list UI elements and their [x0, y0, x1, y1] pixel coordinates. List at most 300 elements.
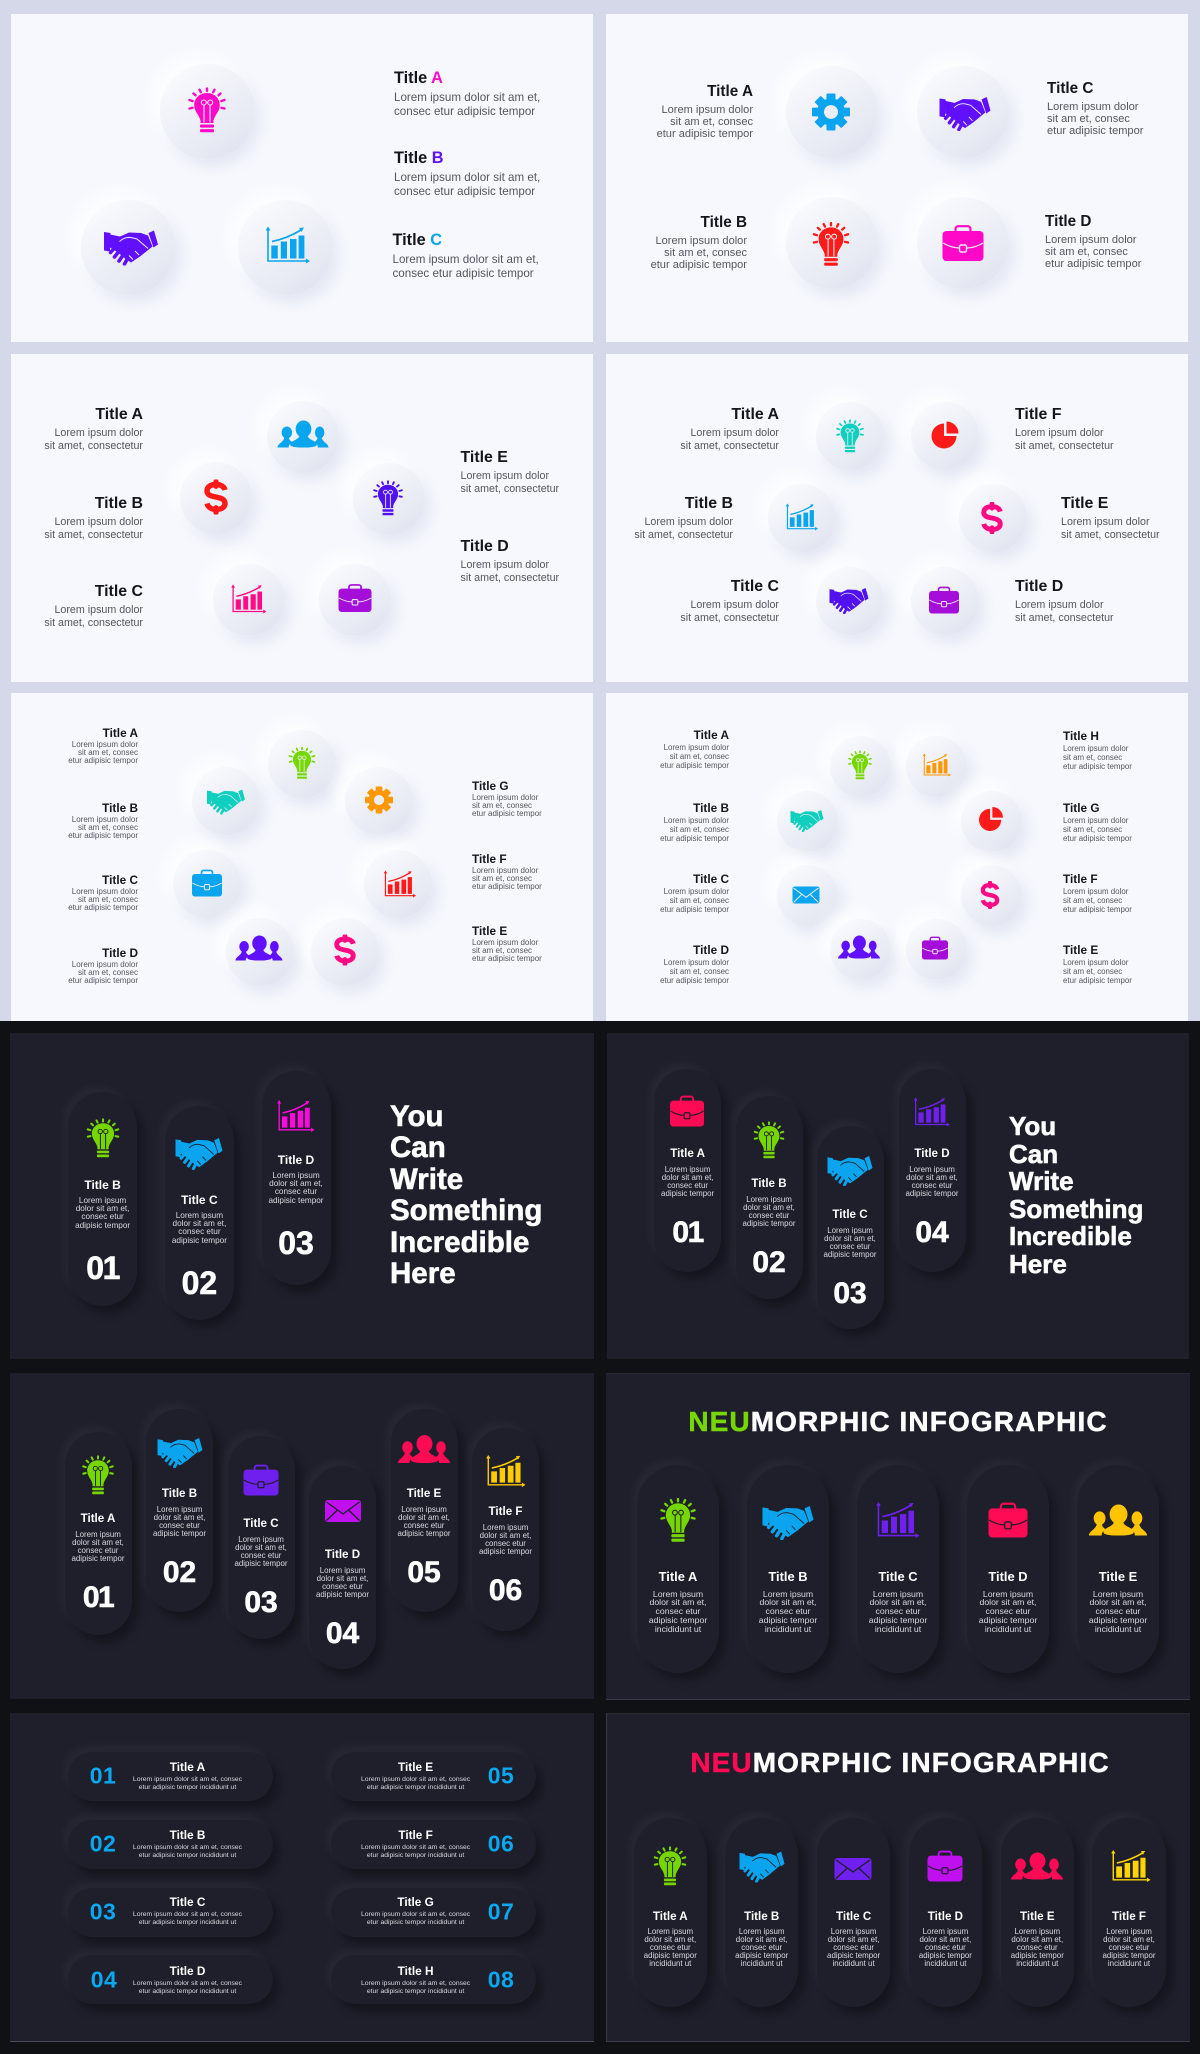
text: Title E: incididunt ut: [1095, 1624, 1141, 1634]
text: Title G: [1063, 801, 1132, 843]
text: Title C: Lorem ipsum dolor: [1047, 101, 1138, 113]
text: Title D: adipisic tempor: [979, 1615, 1037, 1625]
text: Title E: [361, 1759, 470, 1792]
circle: dollar: [961, 864, 1022, 926]
number 07: 07: [488, 1898, 514, 1924]
text: Title F: [1015, 406, 1114, 452]
text: Title B: Title B: [84, 1178, 121, 1192]
pill B: [725, 1818, 798, 2007]
text: Title B: Title B: [685, 495, 733, 512]
text: Title C: Lorem ipsum dolor: [664, 886, 729, 896]
text: Title C: [172, 1193, 227, 1245]
text: Title G: Lorem ipsum dolor: [472, 793, 538, 802]
circle: chart: [238, 200, 332, 294]
pill E: [1001, 1818, 1074, 2007]
text: Title D: adipisic tempor: [268, 1196, 324, 1205]
pill 05: [331, 1752, 536, 1801]
text: Title D: Lorem ipsum dolor: [664, 958, 729, 966]
text: Title B: Title B: [394, 149, 443, 167]
text: Title F: dolor sit am et,: [1103, 1935, 1155, 1944]
number 01: 01: [672, 1216, 703, 1249]
text: Title C: Lorem ipsum: [827, 1226, 873, 1235]
text: Title C: [234, 1516, 288, 1568]
text: Title D: sit amet, consectetur: [1015, 612, 1114, 624]
text: Title D: adipisic tempor: [905, 1189, 959, 1198]
text: Title C: consec etur adipisic tempor: [392, 267, 534, 280]
number 08: 08: [488, 1966, 514, 1992]
text: Title C: Lorem ipsum dolor sit am et,: [392, 253, 539, 266]
text: Title E: Lorem ipsum: [401, 1505, 447, 1514]
circle: gear: [345, 767, 413, 835]
text: Title H: Title H: [1063, 729, 1099, 743]
circle: handshake: [816, 567, 884, 635]
text: Title E: Lorem ipsum dolor sit am et, consec: [361, 1776, 470, 1783]
text: Title A: etur adipisic tempor incididunt ut: [139, 1784, 236, 1791]
circle: people: [267, 401, 339, 473]
text: Title C: [133, 1894, 242, 1927]
number 04: 04: [915, 1216, 949, 1249]
pill 07: [331, 1888, 536, 1937]
text: Title C: [68, 873, 138, 912]
text: Title E: Title E: [1061, 495, 1108, 512]
circle: people: [830, 918, 890, 980]
circle: briefcase: [319, 564, 391, 636]
pill 03: [262, 1071, 330, 1285]
text: Title E: Title E: [398, 1760, 433, 1774]
number 06: 06: [489, 1574, 522, 1607]
text: Title B: consec etur: [749, 1211, 789, 1220]
circle: chart: [213, 564, 285, 636]
text: Title D: Title D: [1045, 213, 1091, 230]
text: Title A: [680, 406, 779, 452]
text: Title B: dolor sit am et,: [743, 1203, 795, 1212]
number 01: 01: [90, 1762, 116, 1788]
text: Title D: consec etur: [322, 1582, 363, 1591]
text: Title D: consec etur: [275, 1187, 317, 1196]
text: Title A: Lorem ipsum dolor: [72, 740, 138, 749]
text: Title H: sit am et, consec: [1063, 753, 1122, 762]
text: Title A: adipisic tempor: [661, 1189, 714, 1198]
text: Title D: Lorem ipsum dolor sit am et, consec: [133, 1980, 242, 1987]
text: Title B: Title B: [701, 214, 747, 231]
pill A: [634, 1818, 707, 2007]
text: Title B: adipisic tempor: [742, 1219, 796, 1228]
text: Title D: [133, 1963, 242, 1996]
text: Title D: Title D: [914, 1147, 950, 1160]
text: Title B: dolor sit am et,: [76, 1204, 129, 1213]
text: Title D: consec etur: [925, 1943, 966, 1952]
pill A: [637, 1465, 719, 1673]
text: Title D: [1015, 578, 1114, 624]
icon: briefcase: [670, 1096, 704, 1126]
headline: Write: [1009, 1166, 1074, 1196]
text: Title D: [660, 943, 729, 985]
text: Title D: sit am et, consec: [1045, 246, 1128, 258]
number 02: 02: [163, 1556, 196, 1589]
icon: briefcase: [928, 1850, 963, 1882]
text: Title D: adipisic tempor: [919, 1951, 972, 1960]
icon: handshake: [739, 1852, 784, 1882]
text: Title D: Lorem ipsum: [983, 1589, 1033, 1599]
text: Title G: Title G: [397, 1895, 434, 1909]
text: Title D: Title D: [325, 1548, 360, 1561]
text: Title F: Title F: [472, 852, 507, 866]
pill 01: [64, 1432, 132, 1635]
icon: chart: [278, 1100, 314, 1132]
text: Title G: Lorem ipsum dolor sit am et, consec: [361, 1911, 470, 1918]
text: Title F: [472, 852, 542, 891]
text: Title D: [268, 1153, 324, 1205]
text: Title D: Lorem ipsum: [909, 1165, 955, 1174]
pill F: [1092, 1818, 1166, 2007]
pill 06: [331, 1820, 536, 1869]
text: Title B: dolor sit am et,: [736, 1935, 788, 1944]
text: Title C: dolor sit am et,: [870, 1597, 926, 1607]
text: Title C: Title C: [1047, 80, 1093, 97]
icon: bulb: [660, 1498, 696, 1542]
text: Title B: etur adipisic tempor incididunt ut: [139, 1852, 236, 1859]
text: Title C: Lorem ipsum: [238, 1535, 284, 1544]
text: Title A: Title A: [694, 728, 729, 742]
text: Title B: Title B: [95, 495, 143, 512]
text: Title B: [759, 1569, 817, 1633]
text: Title B: Title B: [162, 1487, 197, 1500]
text: Title B: adipisic tempor: [759, 1615, 817, 1625]
text: Title F: etur adipisic tempor: [472, 882, 542, 891]
text: Title C: sit amet, consectetur: [680, 612, 779, 624]
text: Title B: Lorem ipsum: [739, 1927, 784, 1936]
text: Title B: Lorem ipsum: [157, 1505, 202, 1514]
text: Title C: Title C: [102, 873, 138, 887]
text: Title D: incididunt ut: [924, 1959, 966, 1968]
icon: handshake: [176, 1138, 222, 1170]
text: Title C: [827, 1909, 880, 1968]
text: Title A: Lorem ipsum: [75, 1530, 121, 1539]
text: Title E: [1089, 1569, 1147, 1633]
text: Title C: [680, 578, 779, 624]
text: Title A: consec etur: [78, 1546, 118, 1555]
circle: dollar: [959, 484, 1027, 552]
circle: chart: [906, 736, 966, 796]
pill D: [909, 1818, 982, 2007]
icon: briefcase: [988, 1502, 1028, 1538]
text: Title C: Title C: [170, 1895, 205, 1909]
pill 04: [68, 1955, 273, 2004]
number 02: 02: [90, 1830, 116, 1856]
text: Title B: Lorem ipsum: [79, 1196, 126, 1205]
text: Title C: incididunt ut: [875, 1624, 921, 1634]
text: Title B: Lorem ipsum dolor: [54, 516, 143, 528]
text: Title A: incididunt ut: [649, 1959, 691, 1968]
text: Title D: incididunt ut: [985, 1624, 1031, 1634]
text: Title D: Title D: [460, 538, 509, 555]
panel: four pills with headline: [607, 1033, 1189, 1359]
text: Title A: Title A: [103, 726, 138, 740]
text: Title H: etur adipisic tempor incididunt ut: [367, 1988, 464, 1995]
text: Title E: incididunt ut: [1016, 1959, 1058, 1968]
text: Title B: Title B: [170, 1828, 205, 1842]
headline: You: [390, 1100, 444, 1133]
text: Title F: sit amet, consectetur: [1015, 440, 1114, 452]
text: Title B: Lorem ipsum dolor: [72, 815, 138, 824]
text: Title F: etur adipisic tempor incididunt ut: [367, 1852, 464, 1859]
text: Title C: Title C: [95, 583, 143, 600]
text: Title D: Lorem ipsum dolor: [1015, 599, 1104, 611]
text: Title G: Title G: [1063, 801, 1100, 815]
text: Title F: sit am et, consec: [472, 874, 532, 883]
text: Title D: Title D: [988, 1569, 1028, 1584]
text: Title C: dolor sit am et,: [828, 1935, 879, 1944]
text: Title A: [644, 1909, 697, 1968]
text: Title A: dolor sit am et,: [662, 1173, 713, 1182]
text: Title B: Lorem ipsum: [763, 1589, 813, 1599]
text: Title E: Lorem ipsum dolor: [460, 470, 549, 482]
text: Title A: Lorem ipsum: [653, 1589, 703, 1599]
icon: people: [1089, 1504, 1147, 1536]
panel: seven circles: [11, 693, 593, 1021]
pill 04: [898, 1069, 966, 1272]
text: Title F: [1102, 1909, 1156, 1968]
text: Title C: Title C: [693, 872, 729, 886]
circle: chart: [768, 484, 836, 552]
text: Title E: etur adipisic tempor: [472, 954, 542, 963]
text: Title A: adipisic tempor: [71, 1554, 125, 1563]
text: Title D: [979, 1569, 1037, 1633]
pill B: [747, 1465, 829, 1673]
text: Title C: etur adipisic tempor incididunt ut: [139, 1919, 236, 1926]
text: Title B: [742, 1176, 796, 1228]
text: Title D: dolor sit am et,: [317, 1574, 368, 1583]
text: Title G: sit am et, consec: [1063, 825, 1122, 834]
number 04: 04: [326, 1617, 359, 1650]
text: Title G: Title G: [472, 779, 508, 793]
icon: chart: [876, 1502, 920, 1538]
text: Title F: Lorem ipsum: [483, 1523, 528, 1532]
circle: handshake: [776, 790, 838, 852]
text: Title C: [869, 1569, 927, 1633]
text: Title B: consec etur: [159, 1521, 200, 1530]
text: Title B: Title B: [102, 801, 138, 815]
text: Title F: adipisic tempor: [479, 1547, 532, 1556]
text: Title F: adipisic tempor: [1102, 1951, 1156, 1960]
text: Title B: [68, 801, 138, 840]
text: Title D: Lorem ipsum: [923, 1927, 968, 1936]
text: Title G: [361, 1894, 470, 1927]
text: Title E: Title E: [407, 1487, 441, 1500]
text: Title B: consec etur: [766, 1606, 810, 1616]
text: Title C: Title C: [181, 1193, 218, 1207]
text: Title A: [657, 83, 753, 140]
text: Title F: consec etur: [1109, 1943, 1149, 1952]
text: Title A: sit amet, consectetur: [44, 440, 143, 452]
text: Title E: consec etur: [404, 1521, 444, 1530]
text: Title F: consec etur: [485, 1539, 526, 1548]
text: Title D: etur adipisic tempor: [68, 976, 138, 985]
text: Title E: dolor sit am et,: [1011, 1935, 1063, 1944]
text: Title A: etur adipisic tempor: [68, 756, 138, 765]
text: Title A: incididunt ut: [655, 1624, 701, 1634]
text: Title C: sit am et, consec: [78, 895, 138, 904]
text: Title C: adipisic tempor: [234, 1559, 288, 1568]
text: Title C: etur adipisic tempor: [660, 905, 729, 914]
text: Title G: [472, 779, 542, 818]
circle: pie: [911, 402, 979, 470]
circle: dollar: [311, 918, 379, 986]
text: Title D: etur adipisic tempor: [1045, 258, 1141, 270]
text: Title C: consec etur: [830, 1242, 870, 1251]
text: Title D: Title D: [928, 1910, 963, 1923]
text: Title E: Lorem ipsum dolor: [1063, 958, 1128, 966]
text: Title A: Title A: [81, 1512, 115, 1525]
text: Title C: Lorem ipsum dolor sit am et, consec: [133, 1911, 242, 1918]
panel: eight horizontal pills: [10, 1713, 594, 2042]
text: Title F: Title F: [1063, 872, 1098, 886]
pill 03: [816, 1126, 884, 1329]
text: Title E: adipisic tempor: [1089, 1615, 1147, 1625]
circle: bulb: [816, 402, 884, 470]
text: Title C: Title C: [392, 231, 442, 249]
text: Title D: [316, 1547, 369, 1599]
circle: briefcase: [906, 918, 966, 980]
headline: Can: [390, 1131, 446, 1164]
pill 02: [68, 1820, 273, 1869]
pill 04: [309, 1466, 376, 1669]
number 01: 01: [83, 1581, 113, 1614]
text: Title E: adipisic tempor: [397, 1529, 451, 1538]
pill 03: [68, 1888, 273, 1937]
number 02: 02: [182, 1265, 217, 1301]
text: Title B: Lorem ipsum: [746, 1195, 792, 1204]
text: Title A: sit am et, consec: [670, 752, 729, 761]
icon: chart: [1112, 1850, 1150, 1882]
text: Title B: Lorem ipsum dolor: [664, 816, 729, 824]
text: Title B: adipisic tempor: [153, 1529, 206, 1538]
text: Title D: Lorem ipsum: [320, 1566, 365, 1575]
text: Title E: sit am et, consec: [472, 946, 532, 955]
text: Title A: Title A: [670, 1147, 705, 1160]
text: Title A: sit amet, consectetur: [680, 440, 779, 452]
text: Title B: etur adipisic tempor: [660, 834, 729, 843]
text: Title E: [1063, 943, 1132, 985]
text: Title D: consec etur: [912, 1181, 952, 1190]
text: Title C: Lorem ipsum dolor: [690, 599, 779, 611]
number 06: 06: [488, 1830, 514, 1856]
circle: bulb: [786, 197, 878, 289]
text: Title C: adipisic tempor: [823, 1250, 877, 1259]
headline: Incredible: [1009, 1221, 1132, 1251]
panel: six pills with title: [606, 1713, 1190, 2042]
headline: Here: [390, 1257, 456, 1290]
text: Title B: sit am et, consec: [78, 823, 138, 832]
text: Title B: [660, 801, 729, 843]
text: Title A: Title A: [170, 1760, 205, 1774]
text: Title C: Lorem ipsum: [831, 1927, 876, 1936]
text: Title D: dolor sit am et,: [269, 1179, 323, 1188]
text: Title D: sit am et, consec: [78, 968, 138, 977]
text: Title F: Lorem ipsum dolor: [1015, 427, 1104, 439]
headline: [1009, 1113, 1143, 1279]
text: Title C: [44, 583, 143, 629]
headline: Something: [1009, 1194, 1143, 1224]
panel: six staggered pills: [10, 1373, 594, 1699]
text: Title A: Lorem ipsum dolor: [664, 742, 729, 752]
text: Title F: Lorem ipsum dolor: [472, 866, 538, 875]
text: Title F: etur adipisic tempor: [1063, 905, 1132, 914]
text: Title A: Title A: [95, 406, 143, 423]
text: Title B: Title B: [744, 1910, 779, 1923]
text: Title F: incididunt ut: [1108, 1959, 1150, 1968]
text: Title E: etur adipisic tempor incididunt ut: [367, 1784, 464, 1791]
text: Title D: Title D: [693, 943, 729, 957]
text: Title C: [1047, 80, 1144, 137]
text: Title D: consec etur: [986, 1606, 1030, 1616]
text: Title D: Lorem ipsum dolor: [72, 960, 138, 969]
text: Title A: [649, 1569, 707, 1633]
text: Title B: consec etur: [81, 1212, 124, 1221]
text: Title B: Lorem ipsum dolor sit am et,: [394, 171, 540, 184]
text: Title C: consec etur: [833, 1943, 874, 1952]
circle: mail: [776, 864, 838, 926]
text: Title D: [905, 1146, 959, 1198]
text: Title G: etur adipisic tempor incididunt ut: [367, 1919, 464, 1926]
text: Title B: [133, 1827, 242, 1860]
number 02: 02: [752, 1246, 786, 1279]
text: Title C: sit amet, consectetur: [44, 617, 143, 629]
text: Title B: sit am et, consec: [670, 825, 729, 834]
text: Title B: consec etur adipisic tempor: [394, 185, 535, 198]
text: Title A: Lorem ipsum: [647, 1927, 693, 1936]
text: Title F: Lorem ipsum: [1106, 1927, 1152, 1936]
text: Title E: Lorem ipsum dolor: [472, 938, 538, 947]
text: Title G: sit am et, consec: [472, 801, 532, 810]
number 03: 03: [833, 1277, 867, 1310]
text: Title D: [68, 946, 138, 985]
text: Title E: Lorem ipsum: [1014, 1927, 1060, 1936]
icon: chart: [914, 1098, 950, 1126]
panel: six circles: [606, 354, 1188, 682]
text: Title A: [661, 1146, 714, 1198]
text: Title C: sit am et, consec: [1047, 113, 1130, 125]
text: Title E: dolor sit am et,: [398, 1513, 450, 1522]
text: Title E: [1011, 1909, 1064, 1968]
text: Title A: [660, 728, 729, 770]
pill 02: [165, 1106, 234, 1320]
text: Title B: [153, 1486, 206, 1538]
text: Title A: consec etur: [656, 1606, 700, 1616]
text: Title A: etur adipisic tempor: [657, 128, 753, 140]
text: Title H: etur adipisic tempor: [1063, 762, 1132, 771]
text: Title D: [1045, 213, 1142, 270]
text: Title A: Title A: [394, 69, 443, 87]
text: Title D: etur adipisic tempor incididunt ut: [139, 1988, 236, 1995]
text: Title H: Lorem ipsum dolor: [1063, 744, 1128, 752]
text: Title B: sit am et, consec: [664, 247, 747, 259]
text: Title A: adipisic tempor: [649, 1615, 707, 1625]
text: Title A: consec etur: [650, 1943, 691, 1952]
text: Title B: etur adipisic tempor: [68, 831, 138, 840]
text: Title D: adipisic tempor: [316, 1590, 369, 1599]
text: Title A: [133, 1759, 242, 1792]
pill C: [817, 1818, 890, 2007]
text: Title D: Lorem ipsum dolor: [460, 559, 549, 571]
icon: bulb: [82, 1456, 114, 1494]
panel: three pills with headline: [10, 1033, 594, 1359]
pill 02: [146, 1409, 213, 1612]
text: Title G: Lorem ipsum dolor: [1063, 816, 1128, 824]
text: Title A: Lorem ipsum dolor sit am et, consec: [133, 1776, 242, 1783]
text: Title A: dolor sit am et,: [72, 1538, 124, 1547]
heading: NEUMORPHIC INFOGRAPHIC: [690, 1747, 1110, 1778]
